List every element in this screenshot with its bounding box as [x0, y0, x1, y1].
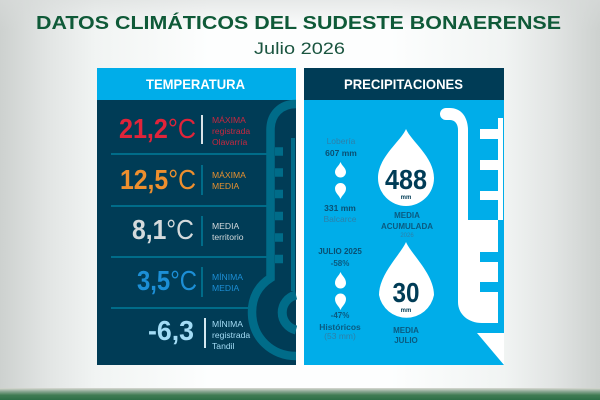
big drop: 30 mm: mm — [401, 308, 411, 314]
comparison: loberia balcarce: 331 mm — [324, 203, 356, 213]
comparison: loberia balcarce: 607 mm — [325, 148, 357, 158]
comparison: julio 2025 historicos: (53 mm) — [324, 331, 356, 341]
row: maxima media: MÁXIMA — [212, 170, 246, 180]
row: maxima registrada: 21,2°C — [119, 113, 196, 144]
panel: precipitaciones — [304, 68, 504, 365]
row: minima registrada: Tandil — [212, 341, 235, 351]
icon: thermometer white — [440, 108, 504, 365]
row: maxima registrada: registrada — [212, 126, 250, 136]
subtitle: Julio 2026 — [254, 39, 345, 58]
row: maxima registrada: MÁXIMA — [212, 115, 246, 125]
label: media acumulada: MEDIA — [394, 211, 420, 220]
label: media julio: MEDIA — [393, 326, 419, 335]
footer band — [0, 388, 600, 400]
big drop: 488 mm: mm — [401, 195, 411, 201]
row: minima registrada: MÍNIMA — [212, 319, 243, 329]
precipitaciones header — [304, 68, 504, 100]
panel: temperatura — [97, 68, 296, 365]
label: media acumulada — [381, 211, 433, 239]
label: media acumulada: ACUMULADA — [381, 222, 433, 231]
temperatura header: TEMPERATURA — [146, 76, 245, 92]
big drop: 30 mm: 30 — [392, 277, 420, 308]
precipitaciones header: PRECIPITACIONES — [344, 76, 463, 92]
row: minima media: MÍNIMA — [212, 272, 243, 282]
comparison: loberia balcarce — [323, 136, 357, 224]
row: minima registrada — [148, 315, 250, 351]
row: maxima registrada — [119, 113, 250, 147]
label: media acumulada: 2026 — [400, 233, 414, 239]
comparison: julio 2025 historicos: Históricos — [319, 322, 361, 332]
row: maxima media: 12,5°C — [120, 164, 196, 195]
row: media territorio: 8,1°C — [132, 214, 194, 245]
comparison: julio 2025 historicos: -47% — [331, 311, 349, 320]
big drop: 488 mm — [378, 129, 434, 206]
comparison: loberia balcarce: Balcarce — [323, 214, 357, 224]
row: minima registrada: -6,3 — [148, 315, 194, 346]
label: media julio: JULIO — [394, 336, 418, 345]
row: minima media: MEDIA — [212, 283, 239, 293]
row: minima media — [137, 265, 243, 297]
row dividers — [111, 153, 269, 309]
row: maxima media: MEDIA — [212, 181, 239, 191]
title: DATOS CLIMÁTICOS DEL SUDESTE BONAERENSE — [36, 12, 561, 33]
big drop: 488 mm: 488 — [385, 164, 427, 195]
comparison: julio 2025 historicos — [318, 247, 362, 341]
row: maxima media — [120, 164, 246, 195]
row: maxima registrada: Olavarría — [212, 137, 248, 147]
row: media territorio: MEDIA — [212, 221, 239, 231]
comparison: julio 2025 historicos: JULIO 2025 — [318, 247, 362, 256]
row: media territorio: territorio — [212, 232, 244, 242]
label: media julio — [393, 326, 419, 345]
row: minima registrada: registrada — [212, 330, 250, 340]
big drop: 30 mm — [379, 242, 434, 318]
comparison: loberia balcarce: Lobería — [327, 136, 356, 146]
icon: thermometer outline — [252, 104, 296, 356]
row: media territorio — [132, 214, 244, 246]
comparison: julio 2025 historicos: -58% — [331, 259, 349, 268]
temperatura header — [97, 68, 296, 100]
row: minima media: 3,5°C — [137, 265, 197, 296]
